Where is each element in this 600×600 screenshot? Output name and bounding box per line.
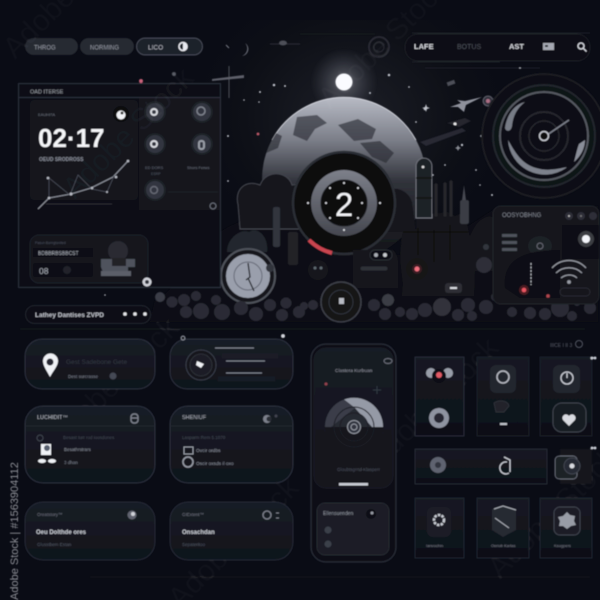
card: location — [25, 339, 155, 389]
top right navigation bar — [405, 33, 590, 68]
card: left info 2: Glusstbem Estan — [37, 542, 72, 547]
planet — [262, 97, 426, 261]
top right navigation bar: AST — [509, 42, 524, 51]
small top ring icon — [300, 34, 389, 57]
icon: search — [578, 43, 586, 52]
clouds and mechanical silhouettes — [237, 174, 496, 271]
watermark text: Adobe Stock — [42, 311, 186, 455]
central dial with number 2 — [293, 152, 395, 254]
small label: EAUHITA — [38, 112, 55, 117]
indicator dots — [565, 212, 597, 220]
tile: star — [540, 498, 592, 558]
space scene stars — [104, 67, 546, 296]
icon: circular dial — [186, 350, 216, 380]
icon: card — [543, 43, 554, 50]
icon: wifi — [552, 260, 586, 283]
icon: swirl — [500, 457, 510, 474]
card: left info 1: Besathrstrars — [64, 447, 92, 452]
panel: device controls — [493, 206, 599, 304]
card: left info 2 — [25, 502, 155, 560]
small spaceship and crescent icons — [139, 40, 300, 136]
row two: Oscir oxsds il oxo — [196, 461, 234, 467]
tile: swirl icons — [477, 357, 529, 436]
satellite — [212, 66, 244, 98]
card: location: Dest surcrasse — [68, 374, 99, 379]
tile: star: Ksugpers — [554, 543, 571, 548]
nav pill 1: THROG — [34, 46, 56, 52]
time readout: 02·17 — [38, 123, 104, 153]
icon: camera — [555, 456, 580, 479]
icon: heart button — [553, 403, 586, 432]
icon: toggle disc — [128, 510, 136, 520]
icon: moon toggle — [263, 414, 278, 423]
code digits: 08 — [39, 266, 49, 276]
card: left info 2: Oreatstory™ — [37, 512, 63, 517]
small eye glyphs — [590, 356, 596, 450]
icon button column: ESRP — [151, 172, 161, 176]
top navigation pills — [25, 38, 202, 55]
panel heading: OOSYOBHNG — [502, 213, 542, 219]
slider lines — [215, 348, 278, 379]
list bars — [502, 234, 517, 251]
satellite card with code entry: Pasun Burngtonited — [35, 241, 66, 245]
rounded blobs along scene floor — [155, 244, 596, 321]
card: location: Gest Sadebone Gete — [66, 359, 127, 366]
nav pill 2 — [80, 38, 134, 55]
card: right info 1 — [170, 406, 293, 483]
card: right info 2 — [170, 502, 293, 560]
panel: clock and chart — [18, 84, 220, 288]
glowing light — [578, 231, 594, 247]
nav pill 3 with toggle: LICO — [148, 44, 163, 52]
curved console — [505, 250, 560, 298]
dark scene base behind machines — [150, 206, 598, 322]
icon: record button — [113, 106, 129, 122]
central dial with number 2: 2 — [335, 186, 353, 223]
icon: robot — [37, 435, 56, 463]
icon: lock — [131, 414, 138, 423]
watermark text: Adobe Stock — [57, 61, 201, 205]
tile: shield: Oeriob Karlas — [491, 543, 515, 548]
icon: red eye — [426, 368, 453, 383]
phone lower card: Ellensuenden — [323, 511, 354, 517]
icon: location pin — [43, 354, 58, 377]
icon: gear — [429, 408, 449, 428]
card: left info 1 — [25, 406, 155, 483]
status pill — [26, 306, 150, 324]
camera and side gauges — [162, 228, 361, 322]
icon: white ring button — [142, 278, 152, 286]
card: left info 1: Besast turr rod ioosdones — [63, 435, 115, 440]
icon: clock toggle — [263, 511, 279, 519]
panel title: OAD ITERSE — [30, 90, 64, 96]
tile: shield — [477, 498, 529, 558]
wide tile — [415, 449, 592, 484]
top right navigation bar: LAFE — [414, 42, 434, 51]
tile: power and heart icons — [540, 357, 592, 436]
line chart — [38, 160, 129, 209]
top right navigation bar: BOTUS — [457, 44, 481, 51]
knob — [528, 236, 552, 258]
nav pill 2: NORMING — [90, 46, 119, 52]
card: sliders — [170, 334, 293, 389]
icon button column: ED DORS — [145, 165, 164, 170]
icon: info — [63, 266, 71, 274]
card: right info 1: Lasparm Rem 5.1070 — [182, 435, 226, 440]
card: right info 2: Sepateritoo — [182, 542, 206, 547]
right radar dial — [482, 74, 600, 198]
alarm clock gauge — [221, 207, 298, 303]
icon: magnifier — [430, 457, 446, 473]
chart caption: OEUD SRODROSS — [39, 157, 84, 163]
card: right info 2: Onsachdan — [182, 530, 215, 536]
card: left info 1: LUCHIDIT™ — [37, 415, 68, 421]
robot hand — [400, 158, 475, 296]
icon button column — [139, 98, 220, 210]
icon tile grid header — [550, 340, 582, 349]
nav pill 3 with toggle — [136, 38, 202, 55]
card: right info 1: SHENIUF — [182, 415, 207, 421]
satellite card with code entry: BDBBRBSBBCST — [38, 251, 79, 257]
watermark text: Adobe Stock — [362, 331, 506, 475]
phone lower card — [317, 503, 389, 555]
icon: printer — [101, 241, 135, 276]
status pill: Lathey Dantises ZVPD — [35, 312, 104, 319]
moon with glow — [310, 48, 378, 116]
music disc — [325, 398, 383, 456]
tile: eye and gear icons — [415, 357, 464, 436]
phone home bar — [339, 483, 368, 486]
satellite card with code entry — [30, 235, 152, 286]
slider pill — [560, 288, 590, 296]
phone mockup: Gloubtsgrrtd-Klasperr — [337, 467, 381, 472]
icon: power — [561, 372, 573, 384]
phone heading: Clastera Kurbuan — [335, 368, 373, 374]
tile: gear — [415, 498, 464, 558]
vertical Adobe Stock credit: Adobe Stock | #1563904112 — [9, 462, 21, 600]
card: left info 1: 3 dhan — [64, 460, 78, 465]
icon tile grid header: IIICE I II 3 — [550, 343, 572, 349]
icon: phone top badge — [384, 358, 392, 364]
airplane — [420, 80, 482, 146]
phone mockup — [311, 344, 396, 562]
pink orbit marker — [483, 96, 493, 106]
small device with controls — [308, 250, 398, 288]
card: left info 2: Oeu Dolthde ores — [36, 530, 87, 536]
row one: Ovcir ordbs — [196, 448, 221, 454]
card: right info 2: GIExtent™ — [182, 512, 204, 517]
icon button column: Shors Ferws — [187, 165, 209, 170]
inner chart card — [30, 100, 138, 209]
nav pill 1 — [25, 38, 78, 55]
tile: gear: Ianvochin — [426, 543, 443, 548]
